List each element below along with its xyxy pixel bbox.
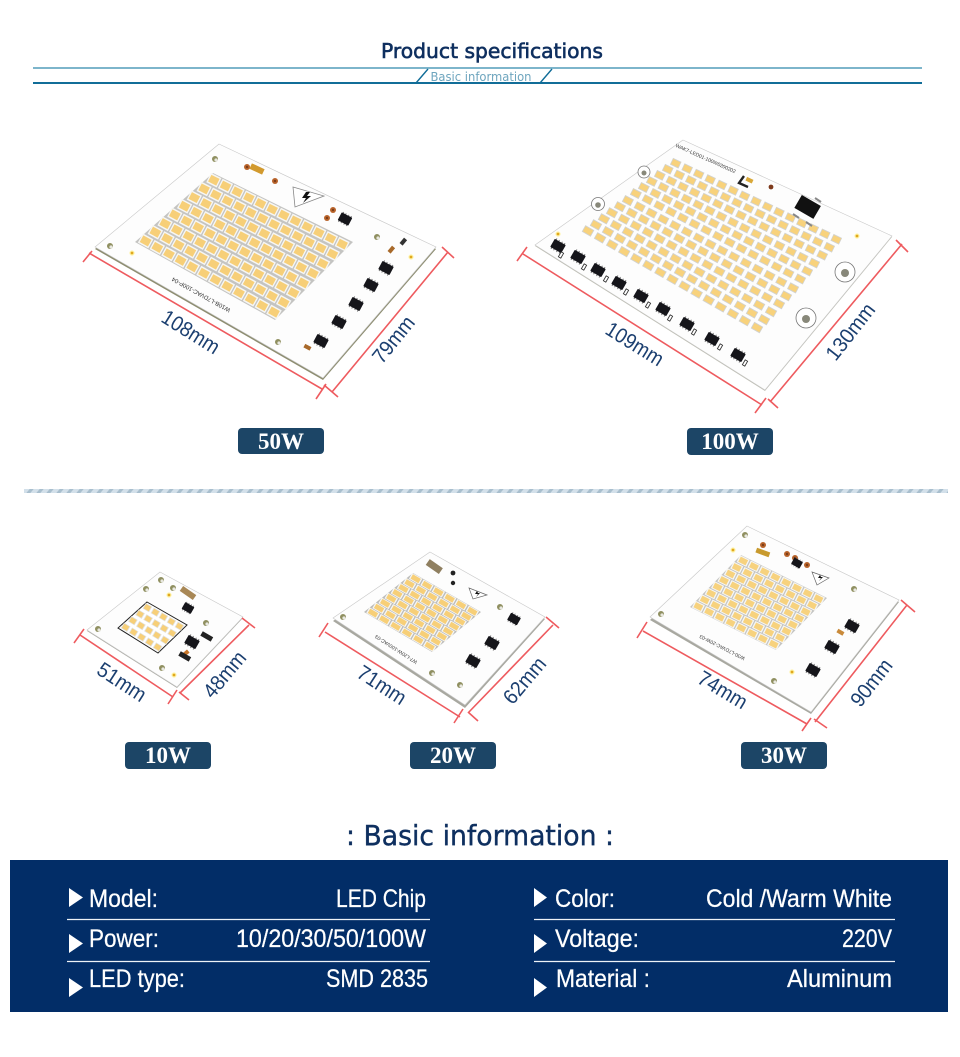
dimension: 108mm bbox=[83, 251, 326, 399]
board 30W PCB: W30-L7DVAC-20W-03 bbox=[699, 633, 746, 661]
badge: 10W bbox=[125, 742, 211, 769]
badge: 20W: 20W bbox=[430, 743, 476, 768]
row: Material bbox=[534, 965, 892, 997]
dimension: 109mm: 109mm bbox=[601, 318, 668, 371]
dimension: 71mm: 71mm bbox=[353, 661, 410, 710]
board 20W PCB: W7-L20W-100VAC-03 bbox=[374, 633, 419, 665]
title: Product specifications: Basic information bbox=[430, 70, 532, 84]
row: LED type bbox=[69, 965, 428, 997]
row: Model: Model: bbox=[89, 885, 158, 913]
dimension: 51mm: 51mm bbox=[93, 658, 150, 707]
row: Power: Power: bbox=[89, 925, 159, 953]
badge: 100W bbox=[687, 428, 773, 455]
row: Voltage bbox=[534, 925, 892, 953]
dimension: 51mm bbox=[74, 629, 177, 707]
badge: 10W: 10W bbox=[145, 743, 191, 768]
dimension: 62mm: 62mm bbox=[499, 653, 551, 709]
heading: Basic information: : Basic information : bbox=[346, 819, 614, 852]
panel: 50W board bbox=[83, 144, 454, 454]
dimension: 62mm bbox=[468, 617, 559, 721]
dimension: 90mm bbox=[814, 600, 915, 728]
panel: 100W board bbox=[517, 140, 908, 455]
divider bbox=[24, 489, 948, 493]
dimension: 74mm: 74mm bbox=[693, 667, 751, 714]
badge: 50W: 50W bbox=[258, 429, 304, 454]
row: Voltage: Voltage: bbox=[555, 925, 639, 953]
dimension: 90mm: 90mm bbox=[846, 655, 898, 711]
badge: 100W: 100W bbox=[701, 429, 759, 454]
row: Color: Color: bbox=[555, 885, 615, 913]
dimension: 130mm bbox=[768, 240, 908, 408]
panel: basic information table bbox=[10, 860, 948, 1012]
board 20W PCB bbox=[333, 552, 545, 708]
dimension: 74mm bbox=[637, 622, 811, 731]
dimension: 48mm bbox=[179, 618, 255, 703]
panel: 30W board bbox=[637, 526, 915, 769]
board 50W PCB: W10B-L7DVAC-100P-04 bbox=[171, 275, 232, 312]
row: Model: LED Chip bbox=[336, 885, 426, 913]
panel: 10W board bbox=[74, 572, 255, 769]
row: Material: Aluminum bbox=[787, 965, 892, 993]
row: Material: Material : bbox=[556, 965, 650, 993]
board 100W PCB bbox=[535, 140, 892, 391]
badge: 30W bbox=[741, 742, 827, 769]
badge: 30W: 30W bbox=[761, 743, 807, 768]
dimension: 48mm: 48mm bbox=[199, 647, 251, 703]
badge: 50W bbox=[238, 428, 324, 454]
row: Color bbox=[534, 885, 892, 913]
row: Power bbox=[69, 925, 426, 953]
row: LED type: LED type: bbox=[89, 965, 185, 993]
row: Color: Cold /Warm White bbox=[706, 885, 892, 913]
title: Product specifications: Product specifications bbox=[381, 39, 603, 63]
dimension: 130mm: 130mm bbox=[821, 299, 880, 365]
dimension: 79mm bbox=[324, 247, 454, 397]
row: Power: 10/20/30/50/100W bbox=[236, 925, 426, 953]
dimension: 79mm: 79mm bbox=[368, 312, 420, 368]
board 100W PCB: WAK7-LED01-100W0200202 bbox=[674, 143, 737, 175]
title: Product specifications bbox=[33, 39, 922, 84]
board 50W PCB bbox=[95, 144, 436, 380]
board 10W PCB bbox=[87, 572, 243, 688]
dimension: 109mm bbox=[517, 247, 766, 413]
panel: 20W board bbox=[319, 552, 559, 769]
dimension: 108mm: 108mm bbox=[157, 306, 224, 359]
dimension: 71mm bbox=[319, 623, 463, 723]
row: Model bbox=[69, 885, 426, 913]
row: LED type: SMD 2835 bbox=[326, 965, 428, 993]
board 30W PCB bbox=[650, 526, 899, 714]
badge: 20W bbox=[410, 742, 496, 769]
row: Voltage: 220V bbox=[842, 925, 892, 953]
